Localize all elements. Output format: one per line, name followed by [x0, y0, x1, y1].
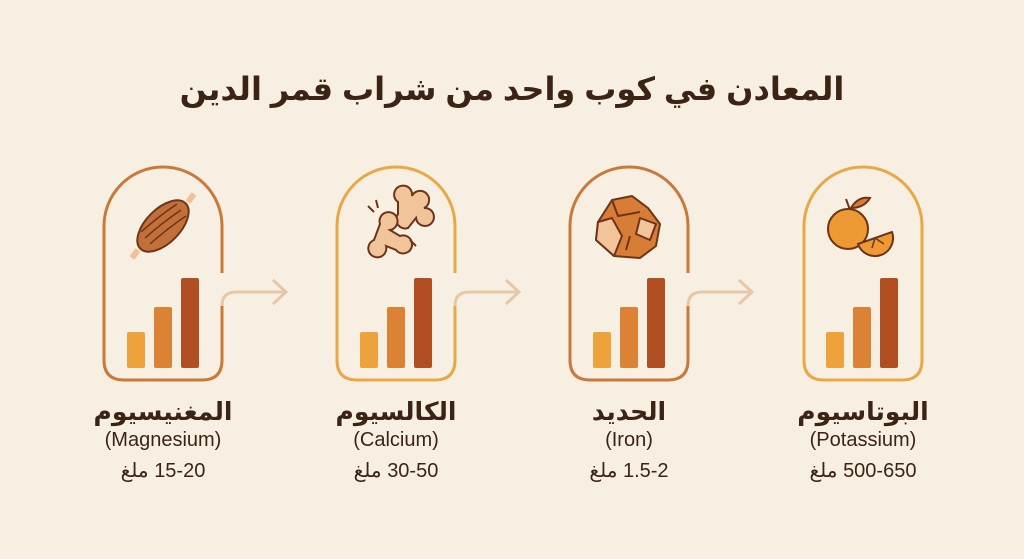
label: magnesium: المغنيسيوم — [94, 398, 232, 427]
label: potassium: (Potassium) — [810, 429, 916, 451]
label: potassium: البوتاسيوم — [797, 398, 929, 427]
arrow — [455, 280, 519, 306]
label: iron: (Iron) — [605, 429, 653, 451]
bar chart — [360, 278, 432, 368]
panel: calcium — [337, 167, 455, 380]
label: potassium: 500-650 ملغ — [810, 460, 916, 482]
bar chart — [593, 278, 665, 368]
label: magnesium: (Magnesium) — [105, 429, 221, 451]
icon: muscle — [128, 191, 198, 261]
arrow — [688, 280, 752, 306]
icon: orange — [828, 198, 893, 256]
label: iron: الحديد — [592, 398, 666, 426]
label: calcium — [336, 398, 456, 482]
panel: potassium — [804, 167, 922, 380]
arrow — [222, 280, 286, 306]
label: calcium: (Calcium) — [353, 429, 439, 451]
label: magnesium: 15-20 ملغ — [121, 460, 205, 482]
label: calcium: 30-50 ملغ — [354, 460, 438, 482]
icon: bones/joint — [368, 186, 434, 257]
label: iron — [589, 398, 669, 482]
panel: magnesium — [104, 167, 222, 380]
label: calcium: الكالسيوم — [336, 398, 456, 427]
label: iron: 1.5-2 ملغ — [589, 460, 669, 482]
panel: iron — [570, 167, 688, 380]
icon: iron ore rock — [596, 196, 660, 258]
title: المعادن في كوب واحد من شراب قمر الدين — [180, 71, 844, 108]
label: magnesium — [94, 398, 232, 482]
bar chart — [826, 278, 898, 368]
bar chart — [127, 278, 199, 368]
label: potassium — [797, 398, 929, 482]
